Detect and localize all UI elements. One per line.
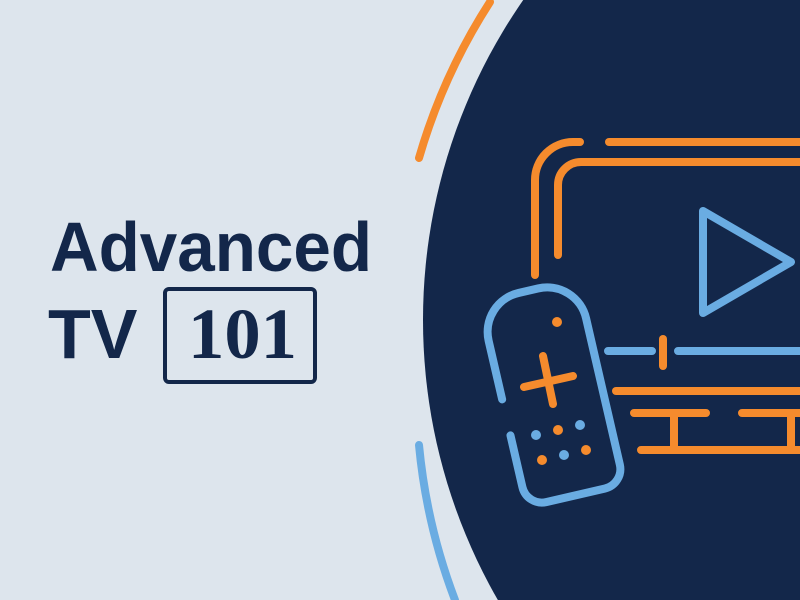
icon: TV [535,142,800,450]
101 box [165,289,315,382]
dark circle [423,0,800,600]
outer blue arc [419,445,455,600]
title: TV [48,295,138,373]
icon: remote [480,279,624,507]
title [48,208,372,373]
title: Advanced [50,208,372,286]
101 box: 101 [188,294,297,374]
outer orange arc [419,2,490,158]
